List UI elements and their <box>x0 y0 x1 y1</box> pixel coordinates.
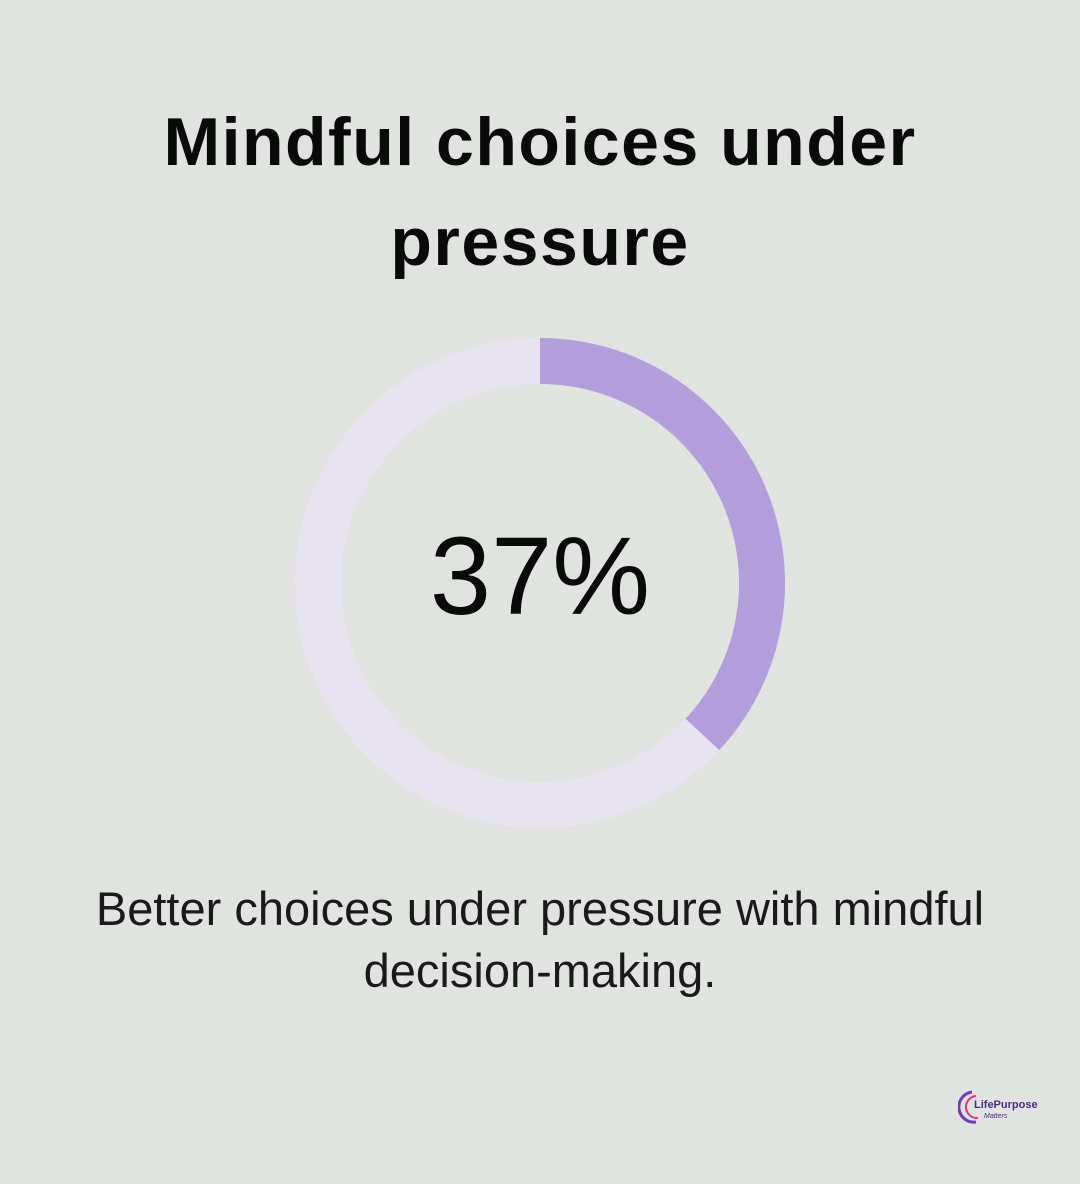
title <box>163 104 917 280</box>
logo: Matters <box>984 1113 1008 1120</box>
logo <box>958 1090 1038 1124</box>
ring progress arc <box>540 361 762 734</box>
title: Mindful choices under <box>163 104 917 180</box>
percentage value: 37% <box>430 515 650 638</box>
logo: LifePurpose <box>974 1099 1038 1111</box>
description text: decision-making. <box>364 944 716 997</box>
description text: Better choices under pressure with mindful <box>96 882 984 935</box>
description text <box>96 882 984 997</box>
title: pressure <box>390 204 690 280</box>
ring track <box>318 361 762 805</box>
